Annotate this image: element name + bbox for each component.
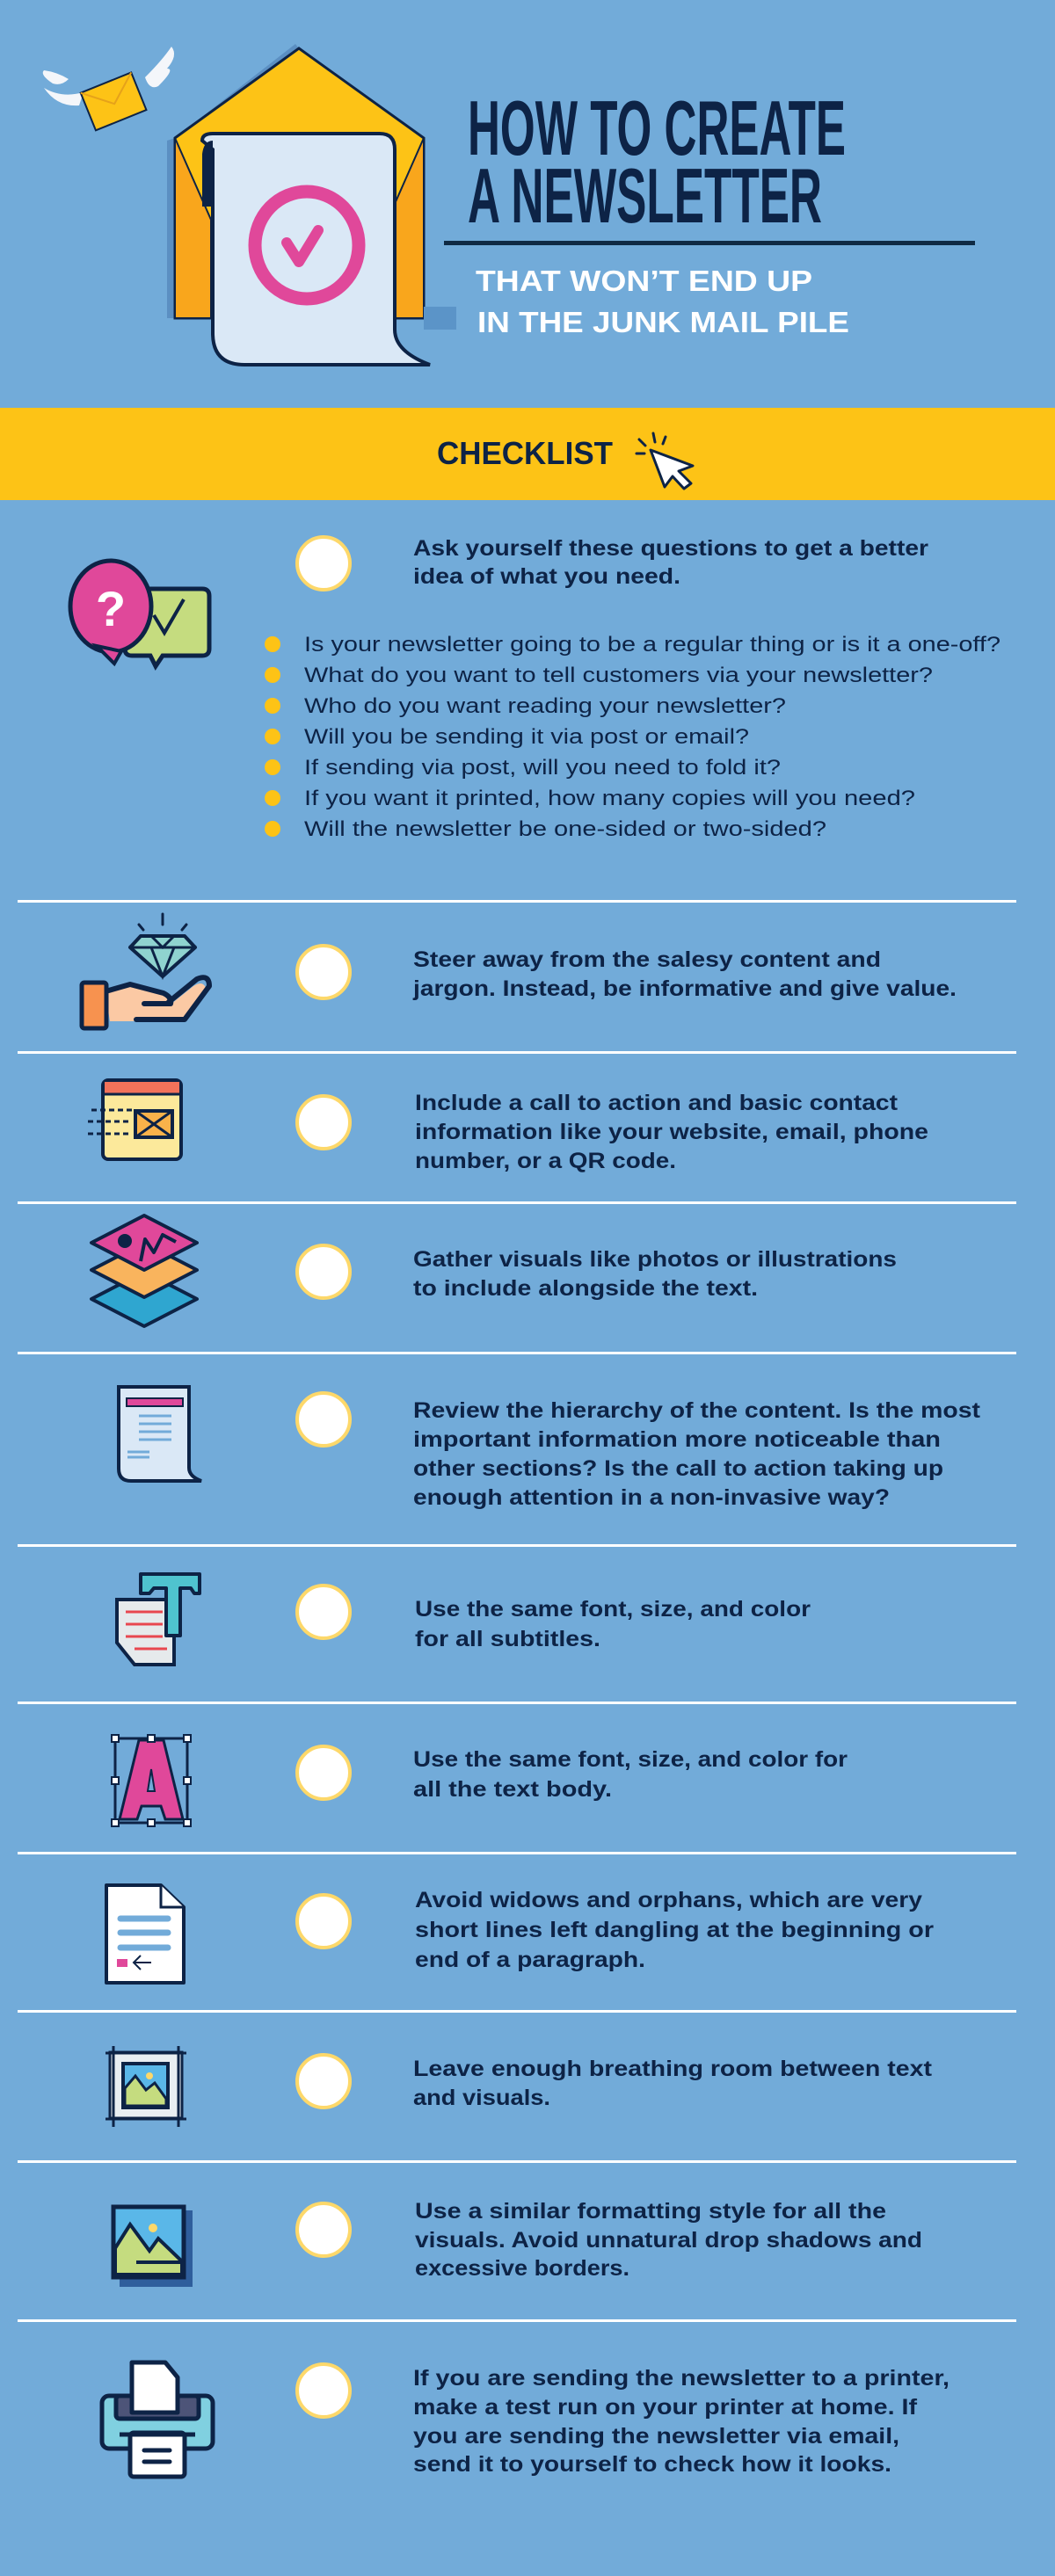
text: test print [413, 2366, 950, 2477]
text: breathing room [413, 2057, 933, 2110]
icon: speech bubbles [70, 561, 209, 666]
text: value content: jargon. Instead, be informative and give value. [412, 976, 957, 1001]
text: hierarchy: other sections? Is the call to action taking up [413, 1456, 943, 1481]
text: visuals [413, 1247, 897, 1301]
text: value content [412, 947, 957, 1001]
text: subtitles [415, 1597, 811, 1651]
text: breathing room: and visuals. [413, 2086, 550, 2110]
panel: call to action [88, 1080, 928, 1173]
text: subtitles: Use the same font, size, and color [415, 1597, 811, 1622]
text: hierarchy [413, 1398, 981, 1510]
panel: visuals [91, 1215, 897, 1326]
text: subtitles: for all subtitles. [415, 1627, 600, 1651]
bullet list: What do you want to tell customers via your newsletter? [304, 664, 933, 687]
text: test print: If you are sending the newsletter to a printer, [413, 2366, 950, 2391]
text: widows and orphans: short lines left dangling at the beginning or [415, 1918, 934, 1942]
text: call to action: information like your website, email, phone [415, 1120, 928, 1144]
panel: test print [102, 2362, 950, 2477]
icon: envelope with checked paper [167, 44, 456, 365]
text: call to action: Include a call to action and basic contact [415, 1091, 899, 1115]
icon: cursor click [637, 433, 693, 489]
checklist banner [0, 408, 1055, 500]
subtitle: THAT WON’T END UP [476, 265, 812, 297]
checklist banner: CHECKLIST [437, 435, 613, 471]
icon: page with arrow [106, 1885, 184, 1983]
text: body text: all the text body. [413, 1777, 612, 1802]
bullet list: If you want it printed, how many copies will you need? [304, 787, 915, 810]
icon: T on paper [117, 1574, 200, 1665]
panel: breathing room [106, 2046, 933, 2127]
heading: questions [413, 536, 928, 589]
text: widows and orphans [415, 1888, 934, 1972]
panel: questions [70, 536, 1000, 841]
icon: document [119, 1387, 201, 1481]
text: formatting style: Use a similar formatting style for all the [415, 2199, 886, 2224]
text: call to action: number, or a QR code. [415, 1149, 676, 1173]
text: widows and orphans: Avoid widows and orphans, which are very [415, 1888, 922, 1912]
heading: questions: Ask yourself these questions to get a better [413, 536, 928, 561]
subtitle [476, 265, 849, 338]
panel: formatting style [113, 2199, 922, 2287]
bullet list: Will you be sending it via post or email? [304, 725, 749, 749]
bullet list: Is your newsletter going to be a regular thing or is it a one-off? [304, 633, 1000, 657]
text: visuals: Gather visuals like photos or illustrations [413, 1247, 897, 1272]
text: call to action [415, 1091, 928, 1173]
bullet list: If sending via post, will you need to fold it? [304, 756, 781, 780]
checkboxes [297, 537, 350, 2417]
dividers [18, 900, 1016, 2322]
panel: widows and orphans [106, 1885, 934, 1983]
text: value content: Steer away from the salesy content and [413, 947, 881, 972]
panel: value content [82, 914, 957, 1028]
bullet list: Who do you want reading your newsletter? [304, 694, 786, 718]
icon: speech bubbles: ? [96, 581, 126, 636]
text: hierarchy: enough attention in a non-invasive way? [413, 1485, 890, 1510]
icon: letter A with handles [112, 1735, 191, 1826]
icon: browser with envelope [88, 1080, 181, 1159]
text: formatting style [415, 2199, 922, 2281]
text: widows and orphans: end of a paragraph. [415, 1948, 645, 1972]
text: hierarchy: important information more noticeable than [413, 1427, 941, 1452]
text: formatting style: visuals. Avoid unnatural drop shadows and [415, 2228, 922, 2253]
bullet list [265, 633, 1000, 841]
text: breathing room: Leave enough breathing room between text [413, 2057, 933, 2081]
text: visuals: to include alongside the text. [413, 1276, 758, 1301]
text: test print: you are sending the newsletter via email, [413, 2424, 899, 2449]
bullet list: Will the newsletter be one-sided or two-sided? [304, 817, 826, 841]
text: hierarchy: Review the hierarchy of the content. Is the most [413, 1398, 981, 1423]
text: formatting style: excessive borders. [415, 2256, 629, 2281]
heading: questions: idea of what you need. [413, 564, 680, 589]
icon: hand with diamond [82, 914, 209, 1028]
panel: body text [112, 1735, 848, 1826]
text: test print: make a test run on your printer at home. If [413, 2395, 918, 2420]
text: test print: send it to yourself to check how it looks. [413, 2452, 891, 2477]
panel: subtitles [117, 1574, 811, 1665]
icon: picture with shadow [113, 2207, 193, 2287]
icon: flying envelope [43, 47, 174, 130]
icon: layered images [91, 1215, 197, 1326]
icon: printer [102, 2362, 213, 2477]
icon: framed picture with guides [106, 2046, 186, 2127]
text: body text [413, 1747, 848, 1802]
subtitle: IN THE JUNK MAIL PILE [477, 306, 849, 338]
title [468, 84, 846, 239]
panel: hierarchy [119, 1387, 981, 1510]
text: body text: Use the same font, size, and color for [413, 1747, 848, 1772]
